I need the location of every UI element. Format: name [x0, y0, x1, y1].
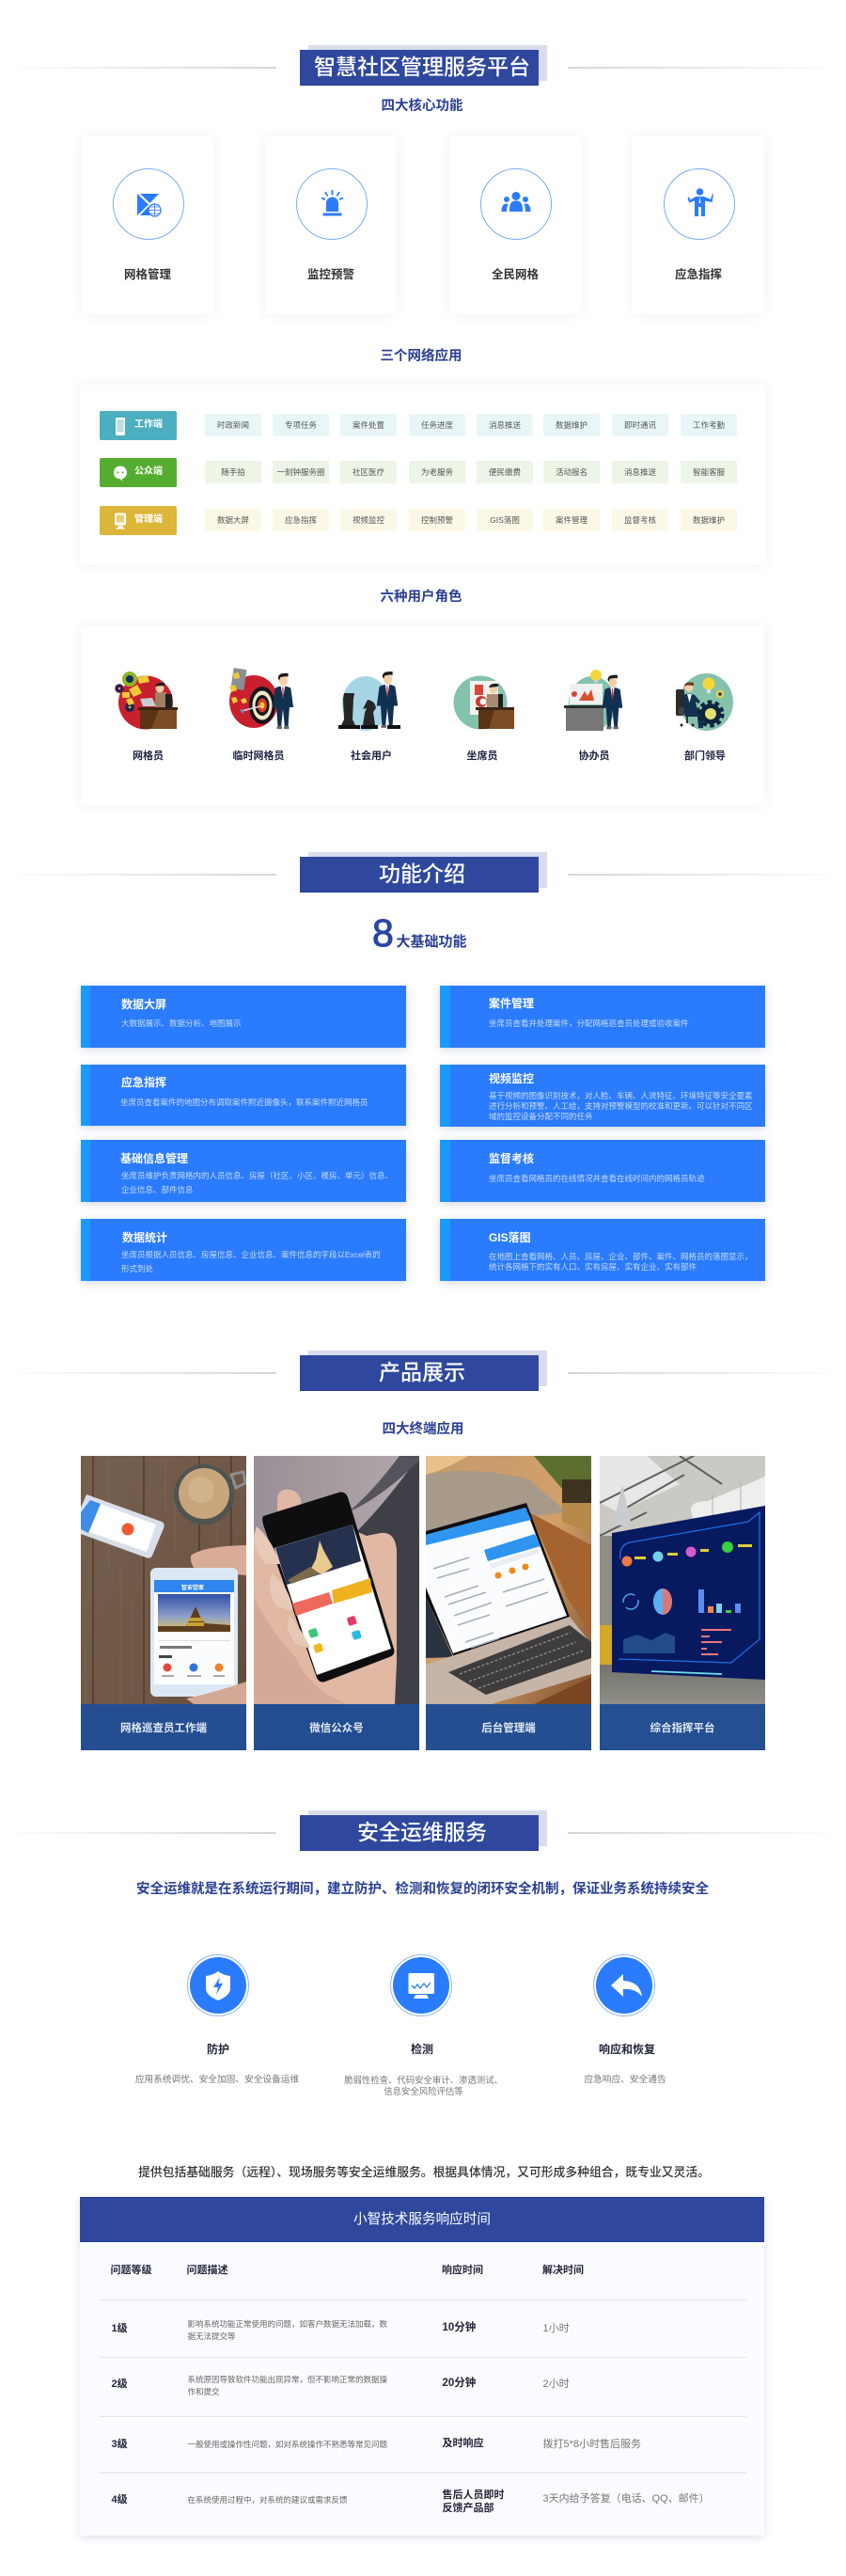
feature: 基础信息管理: 坐席员维护负责网格内的人员信息、房屋（社区、小区、楼房、单元）信息、	[121, 1170, 393, 1179]
card: 监控预警	[265, 136, 397, 314]
feature: 基础信息管理	[81, 1140, 406, 1202]
row: 公众端: 活动报名	[556, 467, 588, 477]
caption: 网格巡查员工作端: 网格巡查员工作端	[120, 1723, 207, 1734]
table title: 小智技术服务响应时间	[353, 2212, 491, 2227]
row: 管理端: 数据大屏	[217, 515, 249, 525]
card: 应急指挥	[633, 136, 764, 314]
row: 公众端: 便民缴费	[489, 467, 521, 477]
row: 1级: 1级	[111, 2323, 128, 2334]
photo card: 后台管理端	[426, 1456, 591, 1750]
row: 工作端	[100, 411, 737, 440]
caption: 微信公众号	[254, 1704, 419, 1750]
feature: 监督考核: 监督考核	[489, 1152, 534, 1165]
button: 公众端: 公众端	[134, 466, 163, 477]
feature: 案件管理: 案件管理	[489, 997, 534, 1010]
row: 2级	[111, 2374, 570, 2396]
text: 检测说明: 脆弱性检查、代码安全审计、渗透测试、	[344, 2075, 503, 2085]
row: 管理端: 数据维护	[693, 515, 725, 525]
text: 服务说明: 提供包括基础服务（远程）、现场服务等安全运维服务。根据具体情况，又可形成多种组合，既专业又灵活。	[138, 2165, 710, 2178]
row: 3级	[111, 2438, 641, 2449]
row: 4级: 反馈产品部	[442, 2502, 494, 2513]
row: 公众端	[100, 458, 737, 487]
panel: 三个网络应用	[80, 385, 765, 564]
feature: 数据统计	[81, 1219, 406, 1281]
icon: 响应和恢复 reply arrow	[593, 1954, 655, 2016]
row: 4级: 3天内给予答复（电话、QQ、邮件）	[543, 2492, 710, 2504]
row: 1级: 10分钟	[442, 2322, 476, 2333]
feature: 视频监控: 视频监控	[489, 1072, 534, 1085]
row: 公众端: 为老服务	[421, 467, 453, 477]
text: 防护: 防护	[207, 2043, 229, 2056]
role: 社会用户: 社会用户	[351, 749, 392, 762]
feature: 案件管理	[440, 986, 765, 1048]
heading: 四大核心功能: 四大核心功能	[382, 99, 462, 114]
row: 管理端: 视频监控	[352, 515, 384, 525]
feature: 监督考核: 坐席员查看网格员的在线情况并查看在线时间内的网格员轨迹	[489, 1174, 705, 1183]
row: 管理端: 控制预警	[421, 515, 453, 525]
row: 2级: 2小时	[543, 2378, 570, 2389]
column header: 响应时间: 响应时间	[442, 2265, 483, 2276]
role: 部门领导: 部门领导	[684, 749, 726, 762]
feature: 数据统计: 形式到处	[121, 1264, 153, 1273]
feature: 视频监控: 基于视频的图像识别技术，对人脸、车辆、人流特征、环境特征等安全要素	[489, 1091, 753, 1100]
feature: 数据大屏	[81, 986, 406, 1048]
feature: 视频监控: 进行分析和预警。人工给，支持对预警模型的校准和更新。可以针对不同区	[489, 1100, 753, 1110]
row: 工作端: 任务进度	[421, 420, 453, 430]
photo card: 网格巡查员工作端	[81, 1456, 246, 1750]
panel: 六种用户角色	[81, 626, 764, 805]
heading: 三个网络应用: 三个网络应用	[380, 349, 462, 364]
caption: 后台管理端: 后台管理端	[481, 1723, 536, 1734]
photo card: 网格巡查员工作端: 智安管家	[181, 1584, 204, 1591]
table: 小智技术服务响应时间	[80, 2197, 764, 2536]
feature: 视频监控	[440, 1065, 765, 1127]
button: 管理端: 管理端	[134, 514, 163, 525]
caption: 综合指挥平台	[600, 1704, 765, 1750]
text: 响应和恢复说明: 应急响应、安全通告	[584, 2075, 666, 2085]
row: 1级: 影响系统功能正常使用的问题，如客户数据无法加载，数	[188, 2319, 387, 2329]
row: 管理端: GIS落图	[490, 515, 520, 525]
row: 3级: 拨打5*8小时售后服务	[543, 2438, 641, 2449]
feature: 监督考核	[440, 1140, 765, 1202]
heading: 六种用户角色: 六种用户角色	[380, 590, 462, 605]
heading: 四大终端应用: 四大终端应用	[382, 1422, 464, 1437]
section header: 产品展示: 产品展示	[379, 1360, 465, 1384]
feature: GIS落图: GIS落图	[489, 1231, 531, 1244]
icon: commander	[664, 168, 735, 240]
row: 公众端: 智能客服	[693, 467, 725, 477]
heading: 8大基础功能	[372, 911, 467, 955]
feature: GIS落图	[440, 1219, 765, 1281]
row: 公众端: 一刻钟服务圈	[276, 467, 325, 477]
heading: 8大基础功能: 8	[372, 911, 394, 955]
row: 工作端: 案件处置	[352, 420, 384, 430]
row: 管理端	[100, 506, 737, 535]
icon: 防护 shield	[187, 1954, 249, 2016]
row: 1级	[111, 2319, 570, 2341]
row: 4级	[111, 2489, 710, 2513]
caption: 后台管理端	[426, 1704, 591, 1750]
row: 1级: 1小时	[543, 2323, 570, 2334]
icon: grid management	[113, 168, 184, 240]
role: 部门领导	[676, 673, 733, 762]
section header: 智慧社区管理服务平台	[53, 45, 793, 86]
feature: 应急指挥: 应急指挥	[121, 1076, 166, 1089]
text: 检测: 检测	[411, 2043, 433, 2056]
role: 网格员	[117, 673, 178, 762]
card: 全民网格: 全民网格	[492, 268, 539, 281]
text: 检测说明: 信息安全风险评估等	[384, 2086, 463, 2095]
role: 协办员: 协办员	[579, 749, 609, 762]
row: 工作端: 消息推送	[489, 420, 521, 430]
caption: 微信公众号: 微信公众号	[309, 1723, 364, 1734]
column header: 问题描述: 问题描述	[186, 2265, 227, 2276]
row: 公众端: 随手拍	[221, 467, 245, 477]
row: 工作端: 专项任务	[285, 420, 317, 430]
button: 工作端	[100, 411, 177, 440]
icon: people group	[480, 168, 552, 240]
text: 安全运维定义: 安全运维就是在系统运行期间，建立防护、检测和恢复的闭环安全机制，保证业务系统持续安全	[136, 1881, 709, 1896]
row: 4级: 4级	[111, 2494, 128, 2505]
text: 检测说明	[344, 2075, 503, 2095]
row: 公众端: 消息推送	[624, 467, 656, 477]
role: 社会用户	[338, 672, 400, 762]
role: 协办员	[564, 670, 622, 762]
feature: 基础信息管理: 基础信息管理	[120, 1152, 188, 1165]
feature: 数据大屏: 数据大屏	[121, 998, 166, 1011]
row: 管理端: 案件管理	[556, 515, 588, 525]
row: 3级: 3级	[111, 2438, 128, 2449]
text: 响应和恢复: 响应和恢复	[599, 2043, 655, 2056]
role: 坐席员	[453, 675, 514, 762]
button: 工作端: 工作端	[134, 419, 163, 430]
role: 临时网格员: 临时网格员	[233, 749, 284, 762]
row: 3级: 一般使用或操作性问题，如对系统操作不熟悉等常见问题	[188, 2440, 387, 2449]
text: 防护说明: 应用系统调优、安全加固、安全设备运维	[135, 2075, 299, 2085]
row: 2级: 2级	[111, 2378, 128, 2389]
feature: 应急指挥	[81, 1065, 406, 1126]
row: 工作端: 数据维护	[556, 420, 588, 430]
card: 全民网格	[449, 136, 581, 314]
feature: 应急指挥: 坐席员查看案件的地图分布调取案件附近摄像头，联系案件附近网格员	[120, 1098, 368, 1107]
role: 坐席员: 坐席员	[466, 749, 498, 762]
row: 2级: 20分钟	[442, 2378, 476, 2389]
icon: 检测 monitor	[390, 1954, 452, 2016]
section header: 功能介绍	[53, 852, 793, 893]
feature: 视频监控: 域的监控设备分配不同的任务	[489, 1112, 593, 1121]
row: 2级: 系统原因导致软件功能出现异常，但不影响正常的数据操	[188, 2374, 387, 2383]
row: 3级: 及时响应	[442, 2438, 483, 2449]
feature: GIS落图: 统计各网格下的实有人口、实有房屋、实有企业、实有部件	[489, 1262, 697, 1272]
row: 工作端: 时政新闻	[217, 420, 249, 430]
caption: 综合指挥平台: 综合指挥平台	[650, 1723, 714, 1734]
section header: 智慧社区管理服务平台: 智慧社区管理服务平台	[314, 55, 530, 79]
row: 工作端: 工作考勤	[693, 420, 725, 430]
row: 公众端: 社区医疗	[352, 467, 384, 477]
card: 应急指挥: 应急指挥	[675, 268, 722, 281]
card: 监控预警: 监控预警	[307, 268, 354, 281]
section header: 安全运维服务	[53, 1810, 793, 1851]
column header: 解决时间: 解决时间	[542, 2265, 584, 2276]
section header: 功能介绍: 功能介绍	[379, 861, 465, 886]
row: 工作端: 即时通讯	[624, 420, 656, 430]
row: 管理端: 应急指挥	[285, 515, 317, 525]
feature: 数据统计: 坐席员根据人员信息、房屋信息、企业信息、案件信息的字段以Excel表的	[121, 1249, 381, 1258]
section header: 产品展示	[53, 1351, 793, 1391]
row: 2级: 作和提交	[188, 2387, 220, 2396]
feature: GIS落图: 在地图上查看网格、人员、房屋、企业、部件、案件、网格员的落图显示，	[489, 1251, 753, 1260]
button: 公众端	[100, 458, 177, 487]
row: 管理端: 监督考核	[624, 515, 656, 525]
table title	[80, 2197, 764, 2242]
row: 4级: 在系统使用过程中，对系统的建议或需求反馈	[188, 2495, 348, 2505]
feature: 基础信息管理: 企业信息、部件信息	[121, 1185, 194, 1194]
feature: 数据统计: 数据统计	[122, 1231, 167, 1244]
row: 1级: 据无法提交等	[188, 2331, 236, 2341]
column header: 问题等级: 问题等级	[111, 2265, 152, 2276]
card: 网格管理: 网格管理	[124, 268, 171, 281]
row: 4级: 售后人员即时	[442, 2489, 504, 2501]
heading: 8大基础功能: 大基础功能	[397, 934, 467, 950]
photo card: 微信公众号	[254, 1456, 419, 1750]
section header: 安全运维服务: 安全运维服务	[357, 1820, 487, 1844]
caption: 网格巡查员工作端	[81, 1704, 246, 1750]
feature: 案件管理: 坐席员查看并处理案件，分配网格巡查员处理或验收案件	[489, 1018, 689, 1027]
role: 临时网格员	[229, 668, 293, 762]
feature: 数据大屏: 大数据展示、数据分析、地图展示	[121, 1019, 242, 1028]
role: 网格员: 网格员	[133, 749, 164, 762]
icon: alarm beacon	[296, 168, 368, 240]
photo card: 综合指挥平台	[600, 1456, 765, 1750]
card: 网格管理	[82, 136, 213, 314]
button: 管理端	[100, 506, 177, 535]
